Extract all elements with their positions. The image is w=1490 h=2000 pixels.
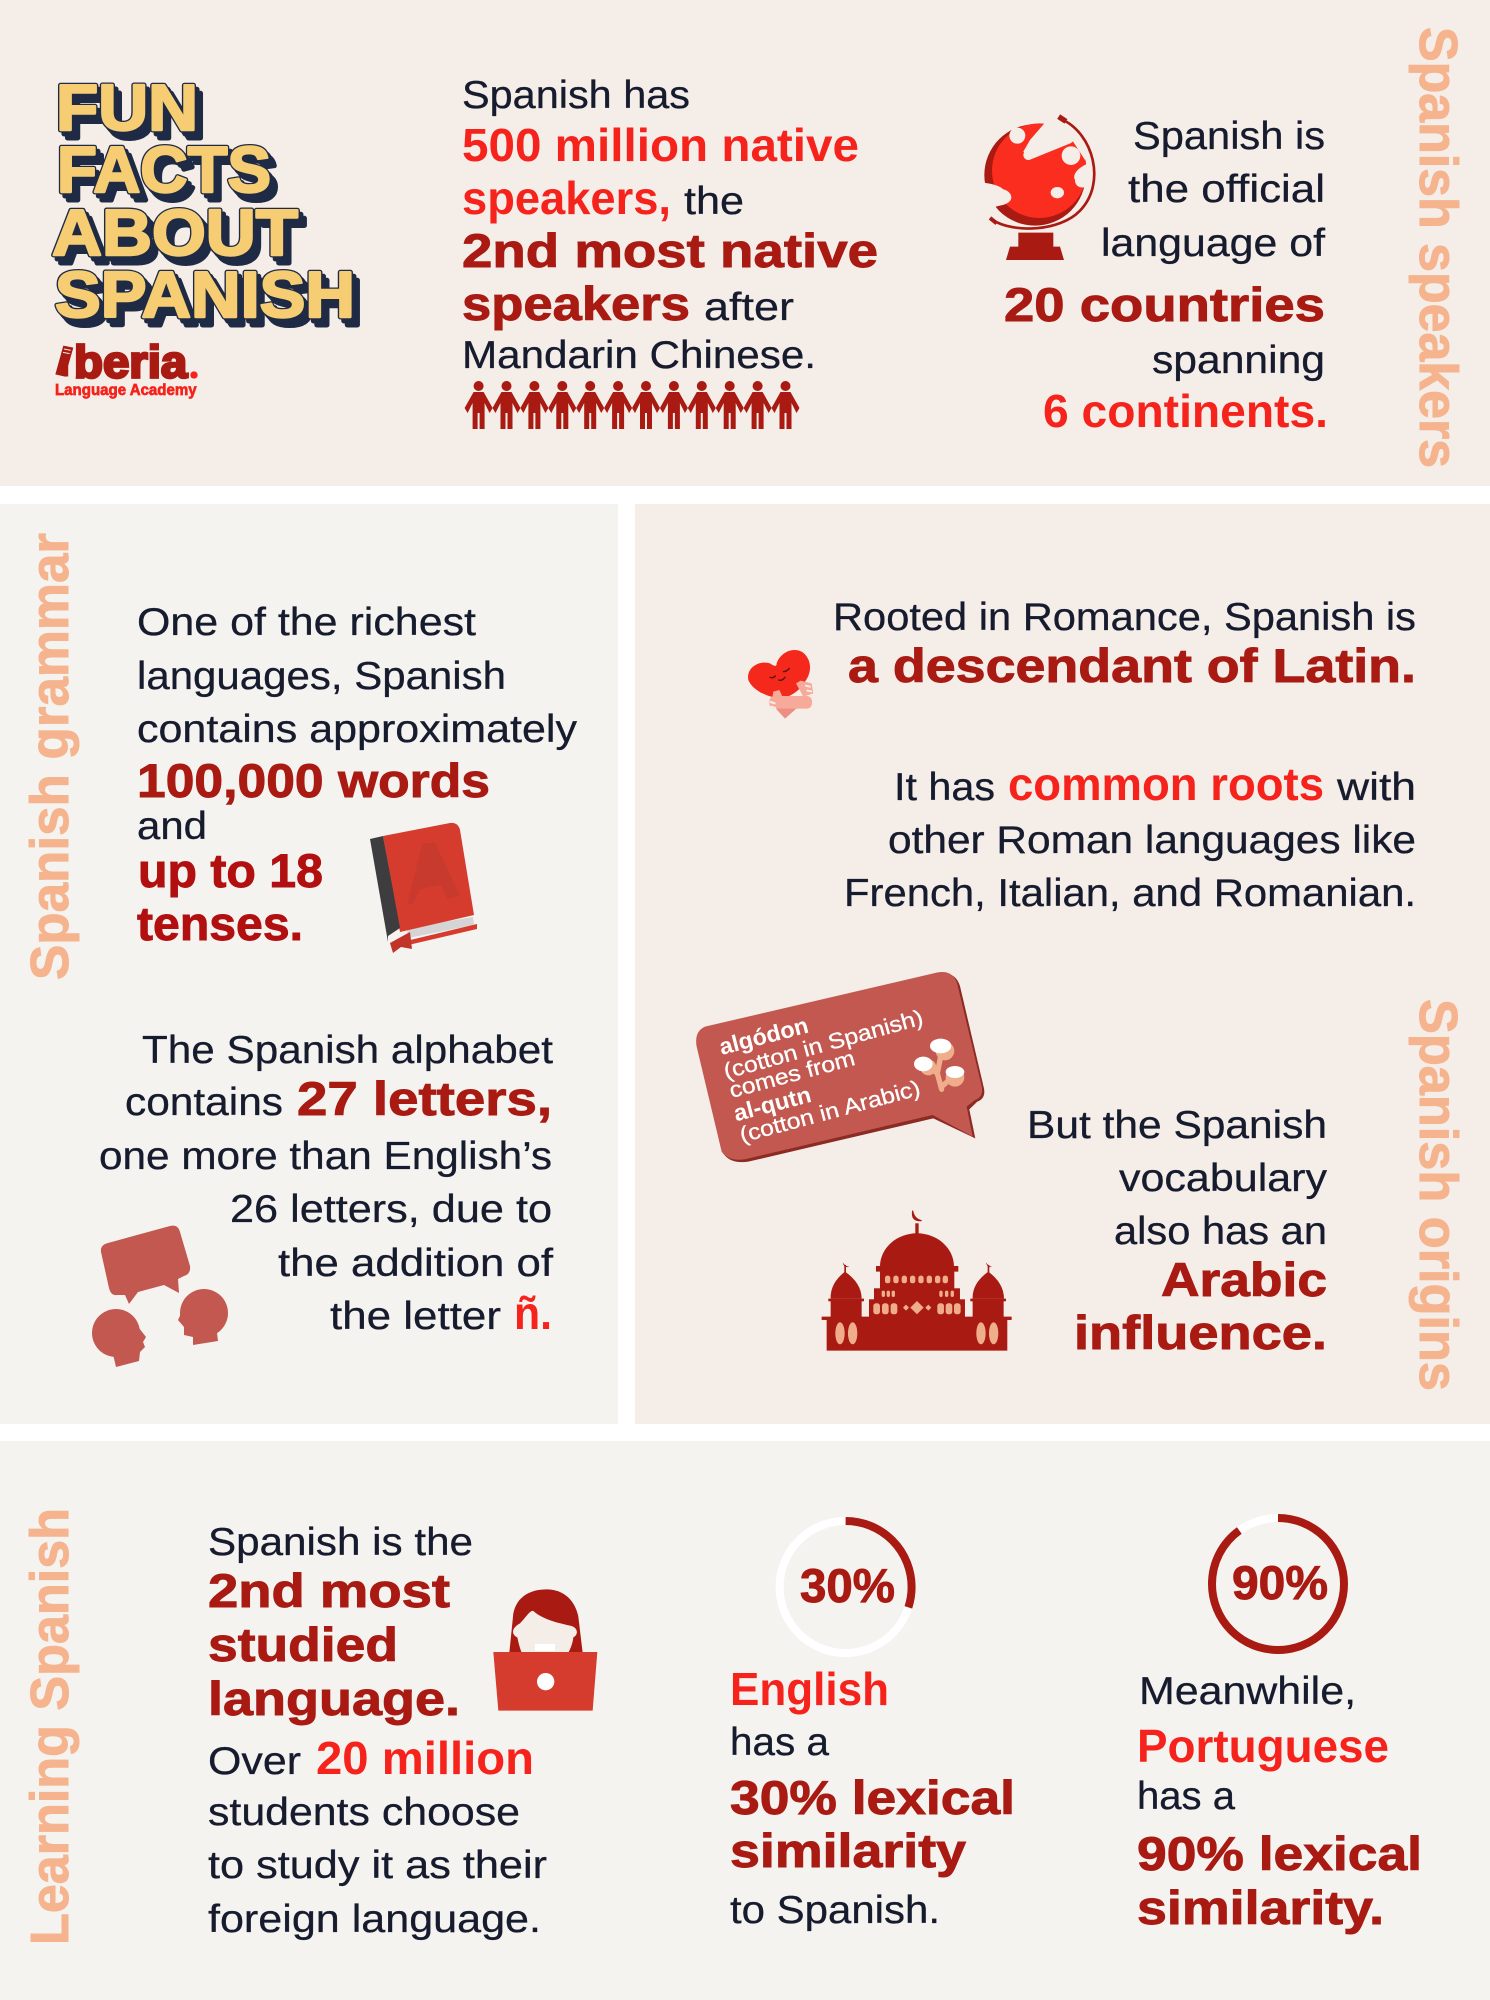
text block: Arabic influence: influence. (1074, 1306, 1327, 1359)
icon: two people talking (92, 1226, 228, 1367)
title: ABOUT (59, 204, 305, 277)
text block: Arabic influence: Arabic (1161, 1253, 1327, 1306)
text block: most studied: studied (208, 1618, 398, 1671)
text block: most studied: to study it as their (208, 1844, 547, 1887)
text block: common roots: with (1336, 766, 1416, 809)
icon: globe (980, 113, 1097, 260)
text block: common roots: common roots (1008, 758, 1324, 810)
text block: native speakers: after (704, 286, 794, 329)
callout: cotton speech bubble: (cotton in Arabic) (737, 1075, 923, 1147)
text block: native speakers: 2nd most native (462, 224, 878, 277)
text block: alphabet: one more than English’s (99, 1135, 552, 1178)
text block: Arabic influence (1027, 1104, 1328, 1359)
panel: Spanish grammar (0, 504, 618, 1424)
text block: richest languages: up to 18 (138, 844, 323, 897)
panel: Learning Spanish (0, 1441, 1490, 2000)
text block: alphabet (99, 1029, 553, 1339)
title: FACTS (57, 133, 271, 206)
text block: English similarity: has a (730, 1721, 829, 1764)
title: FACTS (60, 137, 274, 210)
callout: cotton speech bubble: algódon (716, 1012, 811, 1060)
side heading: Spanish origins: Spanish origins (1408, 999, 1468, 1391)
panel: Spanish speakers (0, 0, 1490, 486)
logo: Iberia Language Academy (55, 337, 198, 399)
title: SPANISH (55, 258, 355, 331)
text block: English similarity: 30% lexical (730, 1771, 1015, 1824)
text block: English similarity (730, 1663, 1015, 1932)
text block: official language: 20 countries (1004, 278, 1325, 331)
text block: native speakers: speakers, (462, 172, 671, 224)
panel: Spanish origins (635, 504, 1490, 1424)
text block: English similarity: similarity (730, 1824, 966, 1877)
title: ABOUT (56, 200, 302, 273)
icon: student with laptop (493, 1589, 597, 1711)
logo: Iberia Language Academy: i (62, 351, 70, 384)
title: ABOUT (52, 196, 298, 269)
text block: official language: language of (1101, 222, 1325, 265)
text block: official language: Spanish is (1133, 115, 1325, 158)
text block: native speakers: the (684, 180, 744, 223)
text block: Portuguese similarity (1137, 1670, 1422, 1934)
text block: richest languages: contains approximately (137, 708, 578, 751)
text block: richest languages: tenses. (137, 897, 303, 950)
text block: Arabic influence: vocabulary (1119, 1157, 1328, 1200)
text block: most studied: Spanish is the (208, 1521, 473, 1564)
text block: native speakers: Spanish has (462, 74, 690, 117)
text block: alphabet: ñ. (514, 1287, 552, 1339)
title (52, 71, 362, 339)
text block: official language: spanning (1152, 339, 1325, 382)
chart: 90% ring (1212, 1518, 1344, 1650)
text block: most studied (208, 1521, 547, 1941)
text block: richest languages (137, 601, 578, 950)
title: SPANISH (55, 258, 355, 331)
text block: most studied: students choose (208, 1791, 520, 1834)
text block: Portuguese similarity: has a (1137, 1775, 1235, 1818)
side heading: Spanish grammar: Spanish grammar (20, 533, 80, 980)
text block: most studied: language. (208, 1672, 460, 1725)
chart: 30% ring (780, 1521, 912, 1653)
text block: alphabet: 26 letters, due to (230, 1188, 552, 1231)
logo: Iberia Language Academy: Language Academy (55, 382, 197, 399)
text block: alphabet: contains (125, 1081, 283, 1124)
text block: alphabet: the addition of (278, 1242, 553, 1285)
icon: mosque (822, 1211, 1012, 1351)
title: ABOUT (52, 196, 298, 269)
text block: English similarity: English (730, 1663, 889, 1715)
text block: common roots (844, 758, 1416, 915)
text block: Portuguese similarity: 90% lexical (1137, 1827, 1422, 1880)
callout: cotton speech bubble (696, 972, 984, 1162)
title: SPANISH (62, 266, 362, 339)
text block: descendant of Latin: a descendant of Latin. (848, 639, 1416, 692)
text block: Arabic influence: also has an (1114, 1210, 1327, 1253)
text block: descendant of Latin (833, 596, 1416, 692)
text block: common roots: other Roman languages like (888, 819, 1416, 862)
text block: Arabic influence: But the Spanish (1027, 1104, 1327, 1147)
text block: most studied: 20 million (316, 1732, 534, 1784)
title: SPANISH (58, 262, 358, 335)
text block: richest languages: languages, Spanish (137, 655, 506, 698)
text block: most studied: foreign language. (208, 1898, 541, 1941)
side heading: Spanish speakers: Spanish speakers (1408, 27, 1468, 468)
title: FACTS (57, 133, 271, 206)
callout: cotton speech bubble: comes from (726, 1045, 858, 1103)
title: FUN (56, 71, 198, 144)
title: FUN (63, 79, 205, 152)
text block: Portuguese similarity: Meanwhile, (1139, 1670, 1356, 1713)
text block: common roots: It has (894, 766, 995, 809)
chart: 90% ring: 90% (1232, 1556, 1328, 1609)
callout: cotton speech bubble: al-qutn (731, 1081, 814, 1126)
text block: native speakers: speakers (462, 277, 690, 330)
logo: Iberia Language Academy: beria (74, 337, 188, 388)
text block: common roots: French, Italian, and Romanian. (844, 872, 1416, 915)
text block: official language (1004, 115, 1328, 437)
text block: English similarity: to Spanish. (730, 1889, 940, 1932)
side heading: Learning Spanish: Learning Spanish (20, 1508, 80, 1945)
text block: richest languages: One of the richest (137, 601, 476, 644)
text block: native speakers: Mandarin Chinese. (462, 334, 816, 377)
text block: alphabet: 27 letters, (297, 1072, 552, 1125)
title: FACTS (64, 141, 278, 214)
text block: native speakers (462, 74, 878, 377)
icon: cotton plant (914, 1039, 964, 1089)
text block: official language: the official (1128, 168, 1325, 211)
text block: descendant of Latin: Rooted in Romance, Spanish is (833, 596, 1416, 639)
chart: 30% ring: 30% (800, 1559, 895, 1612)
text block: official language: 6 continents. (1043, 385, 1328, 437)
title: FUN (60, 75, 202, 148)
text block: Portuguese similarity: similarity. (1137, 1881, 1384, 1934)
text block: Portuguese similarity: Portuguese (1137, 1720, 1389, 1772)
title: FUN (56, 71, 198, 144)
text block: richest languages: 100,000 words (137, 754, 490, 807)
callout: cotton speech bubble: (cotton in Spanish) (721, 1005, 926, 1084)
icon: row of people (465, 381, 800, 429)
text block: alphabet: The Spanish alphabet (142, 1029, 553, 1072)
icon: heart hug (748, 650, 813, 719)
text block: native speakers: 500 million native (462, 119, 859, 171)
icon: book (370, 823, 477, 953)
text block: most studied: 2nd most (208, 1564, 450, 1617)
text block: alphabet: the letter (330, 1295, 501, 1338)
text block: most studied: Over (208, 1740, 301, 1783)
text block: richest languages: and (137, 805, 207, 848)
